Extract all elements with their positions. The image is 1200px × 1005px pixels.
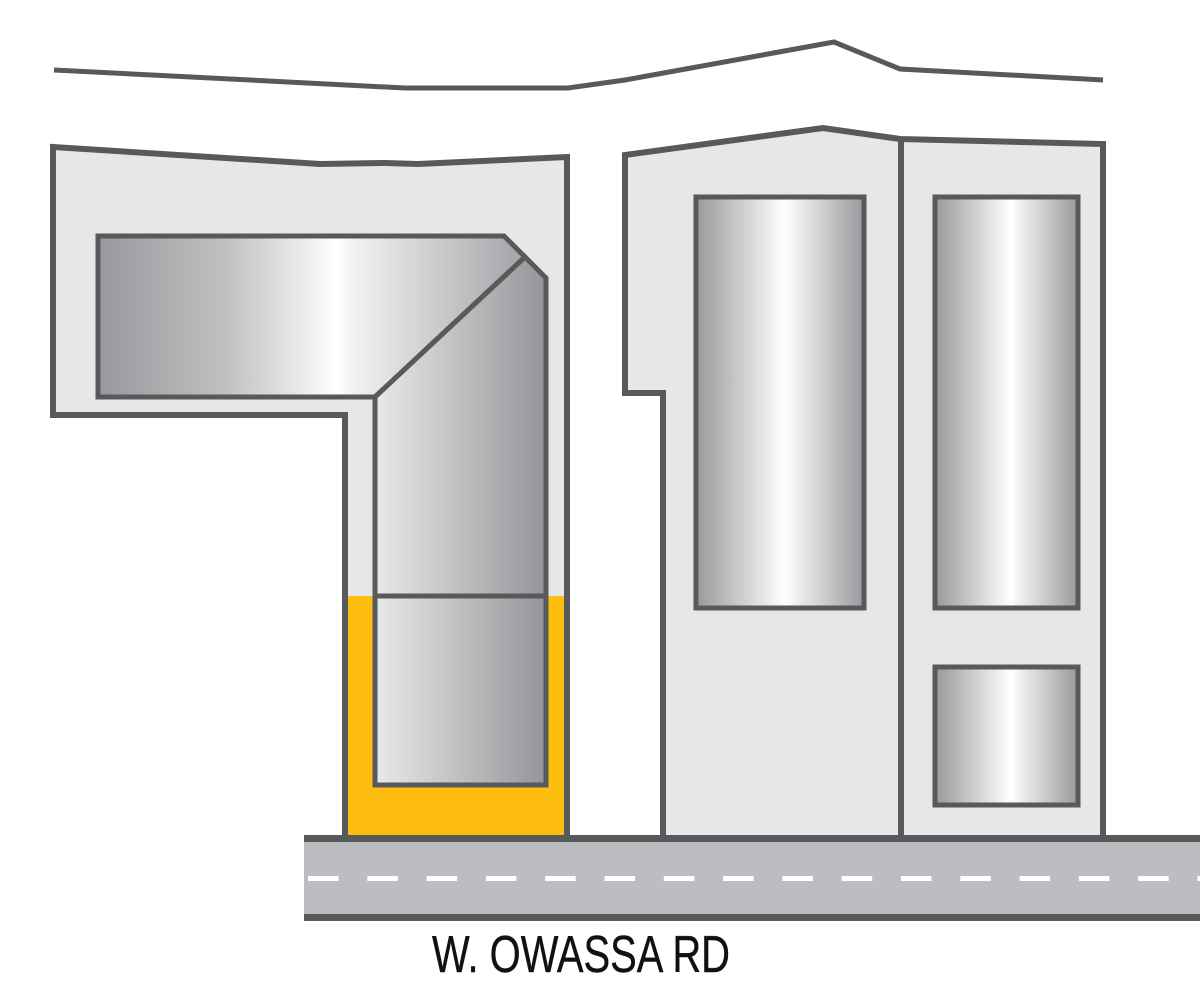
road label: W. OWASSA RD	[432, 926, 730, 984]
right parking: tall lot	[935, 197, 1078, 608]
highlighted yellow parcel	[345, 596, 567, 838]
road	[304, 835, 1200, 921]
right parking: small lot	[935, 667, 1078, 805]
left parking: lower section	[375, 596, 546, 785]
left parking: horizontal section	[98, 236, 525, 397]
left parking: vertical section	[375, 257, 546, 596]
right building lot	[625, 128, 1103, 838]
boundary line at top of site	[54, 42, 1103, 88]
right parking: large center lot	[696, 197, 864, 608]
left building lot	[53, 147, 567, 838]
